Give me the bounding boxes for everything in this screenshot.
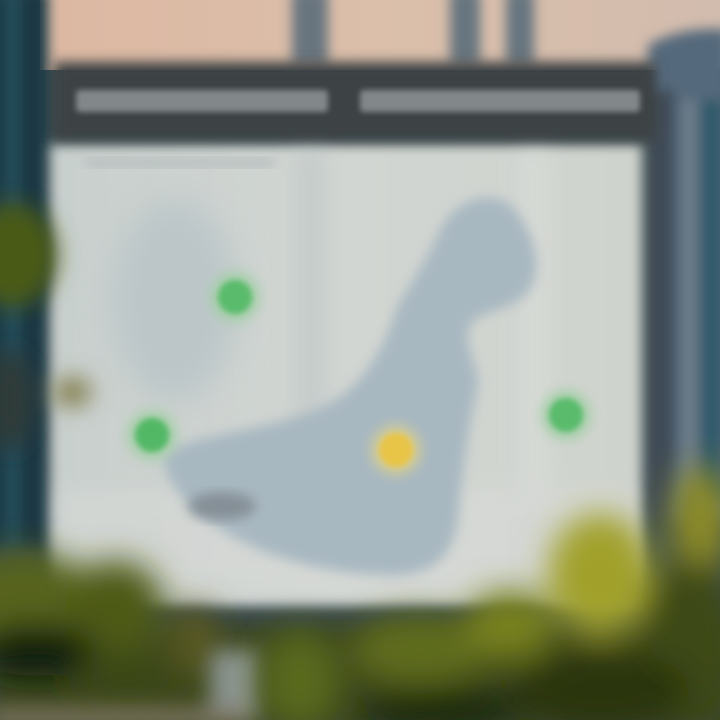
- map silhouette: [164, 198, 537, 575]
- right building: [648, 29, 720, 520]
- marker: green top-left: [210, 272, 260, 322]
- billboard panel: [50, 144, 642, 606]
- blurred heading text: [76, 90, 640, 112]
- foreground: centre vehicle blur: [0, 650, 260, 720]
- board vertical shading: [60, 150, 630, 590]
- foreground ground strip: [0, 625, 720, 720]
- faint map region: west: [113, 200, 237, 400]
- marker: green right: [541, 390, 591, 440]
- foreground trees: right: [260, 465, 720, 720]
- billboard heading band: [54, 62, 656, 140]
- left building: [0, 0, 48, 550]
- blurred subheading: [85, 158, 275, 167]
- tree: upper left: [0, 203, 92, 450]
- marker: yellow centre: [371, 425, 421, 475]
- background towers: [292, 0, 534, 65]
- marker: green left: [127, 410, 177, 460]
- foreground trees: left: [0, 550, 217, 710]
- map detail smudge: [188, 492, 256, 520]
